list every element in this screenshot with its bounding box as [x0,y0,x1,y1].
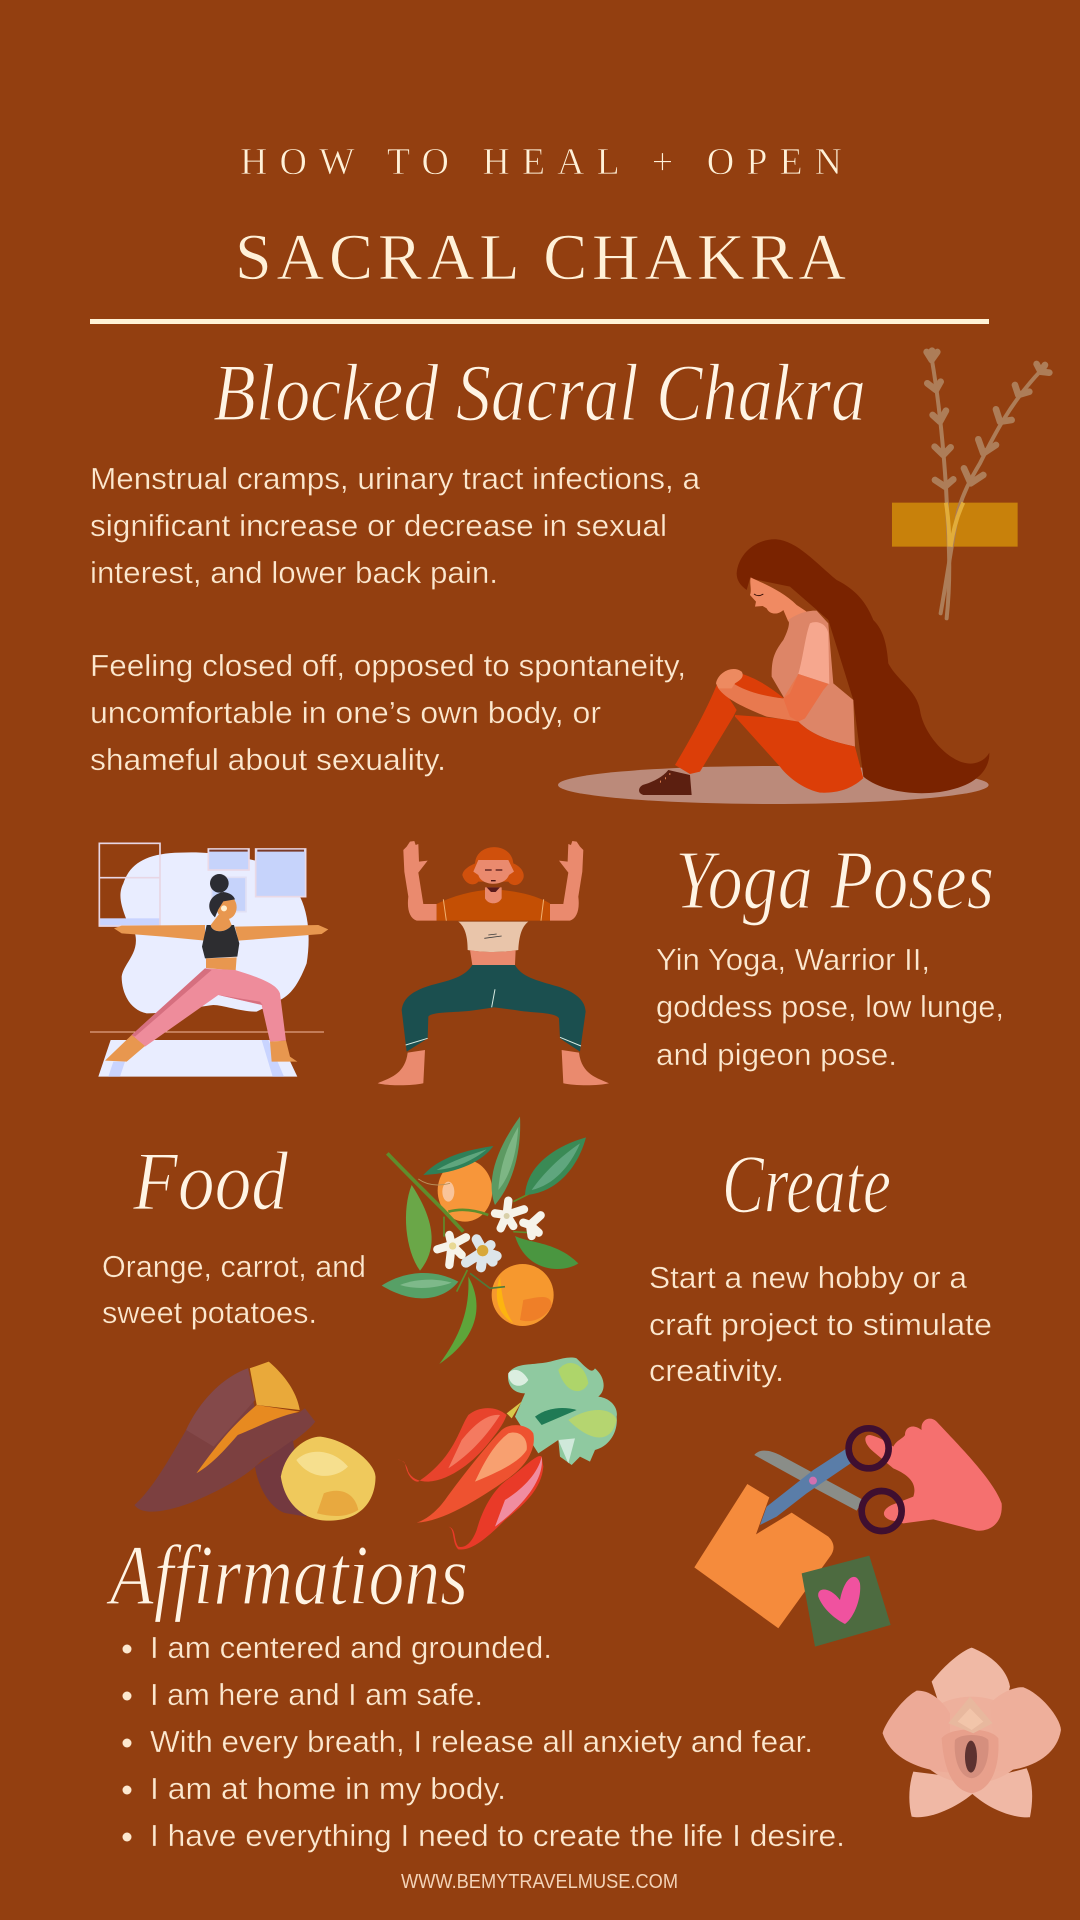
title rule [90,319,989,324]
shoe [639,770,692,795]
text block: yoga poses [656,942,1004,1072]
illustration: hand with scissors cutting paper [694,1419,1002,1647]
shirt [437,890,550,921]
hair [462,847,524,885]
title block [90,141,989,324]
floor shadow [558,766,989,804]
text block: blocked symptoms: Menstrual cramps, urinary tract infections, a [90,461,701,496]
blossoms [437,1201,541,1267]
main title: SACRAL CHAKRA [235,221,846,294]
illustration: seated woman with long hair [558,539,989,804]
heading: Food: Food [132,1135,289,1228]
carrot greens [508,1358,617,1465]
text block: create: Start a new hobby or a [649,1260,968,1295]
text block: create: craft project to stimulate [649,1307,992,1342]
forearm [718,674,828,722]
text block: blocked symptoms: Feeling closed off, opposed to spontaneity, [90,648,686,683]
heading: Create: Create [722,1138,891,1231]
eyebrow heading: HOW TO HEAL + OPEN [240,141,842,183]
hand [865,1419,1002,1531]
text block: food [102,1249,366,1330]
footer URL: WWW.BEMYTRAVELMUSE.COM [401,1871,678,1893]
text block: blocked symptoms: interest, and lower back pain. [90,555,498,590]
scissors [754,1428,902,1531]
figure [105,874,328,1062]
feet [378,1050,425,1085]
legs [675,685,737,774]
hair [737,539,989,793]
heading: Yoga Poses: Yoga Poses [675,834,994,927]
text block: blocked symptoms: shameful about sexuality. [90,742,446,777]
list: affirmations: With every breath, I release all anxiety and fear. [150,1724,813,1759]
illustration: goddess pose [378,841,609,1085]
list: affirmations: I am here and I am safe. [150,1677,483,1712]
text block: create [649,1260,992,1388]
list: affirmations: I am centered and grounded. [150,1630,552,1665]
illustration: sweet potatoes [134,1362,376,1521]
arms [403,841,437,921]
illustration: warrior II pose [90,843,328,1077]
orange paper [694,1484,834,1628]
neck [485,887,502,903]
text block: food: sweet potatoes. [102,1295,317,1330]
heading: Affirmations: Affirmations [106,1527,468,1623]
text block: create: creativity. [649,1353,784,1388]
icon: dried plant with tape [892,351,1049,618]
hand [716,669,743,688]
text block: food: Orange, carrot, and [102,1249,366,1284]
shoe lace dots [660,774,670,782]
carrot roots [398,1408,507,1482]
illustration: orchid flower [883,1648,1061,1817]
background blob [120,852,309,1013]
text block: blocked symptoms: uncomfortable in one’s own body, or [90,695,601,730]
face and neck [750,577,807,622]
list: affirmations: I am at home in my body. [150,1771,506,1806]
text block: yoga poses: goddess pose, low lunge, [656,989,1004,1024]
illustration: carrots [398,1358,617,1550]
closed eye [754,594,763,596]
torso [772,611,855,747]
green card with heart [802,1556,891,1647]
illustration: orange branch [382,1117,586,1364]
text block: blocked symptoms [90,461,701,777]
list: affirmations: I have everything I need to create the life I desire. [150,1818,845,1853]
face [473,860,514,884]
branches [387,1153,540,1292]
leggings [402,965,586,1052]
short sleeve [783,674,828,722]
text block: blocked symptoms: significant increase or decrease in sexual [90,508,667,543]
heading: Blocked Sacral Chakra: Blocked Sacral Chakra [213,347,866,438]
list: affirmations [122,1630,845,1853]
text block: yoga poses: and pigeon pose. [656,1037,897,1072]
sleeve [798,622,829,684]
leaves [423,1146,493,1175]
text block: yoga poses: Yin Yoga, Warrior II, [656,942,930,977]
oranges [438,1160,492,1222]
midriff [458,922,528,952]
mat [98,1040,297,1077]
window and frames [99,843,306,927]
floor line [90,1030,324,1033]
